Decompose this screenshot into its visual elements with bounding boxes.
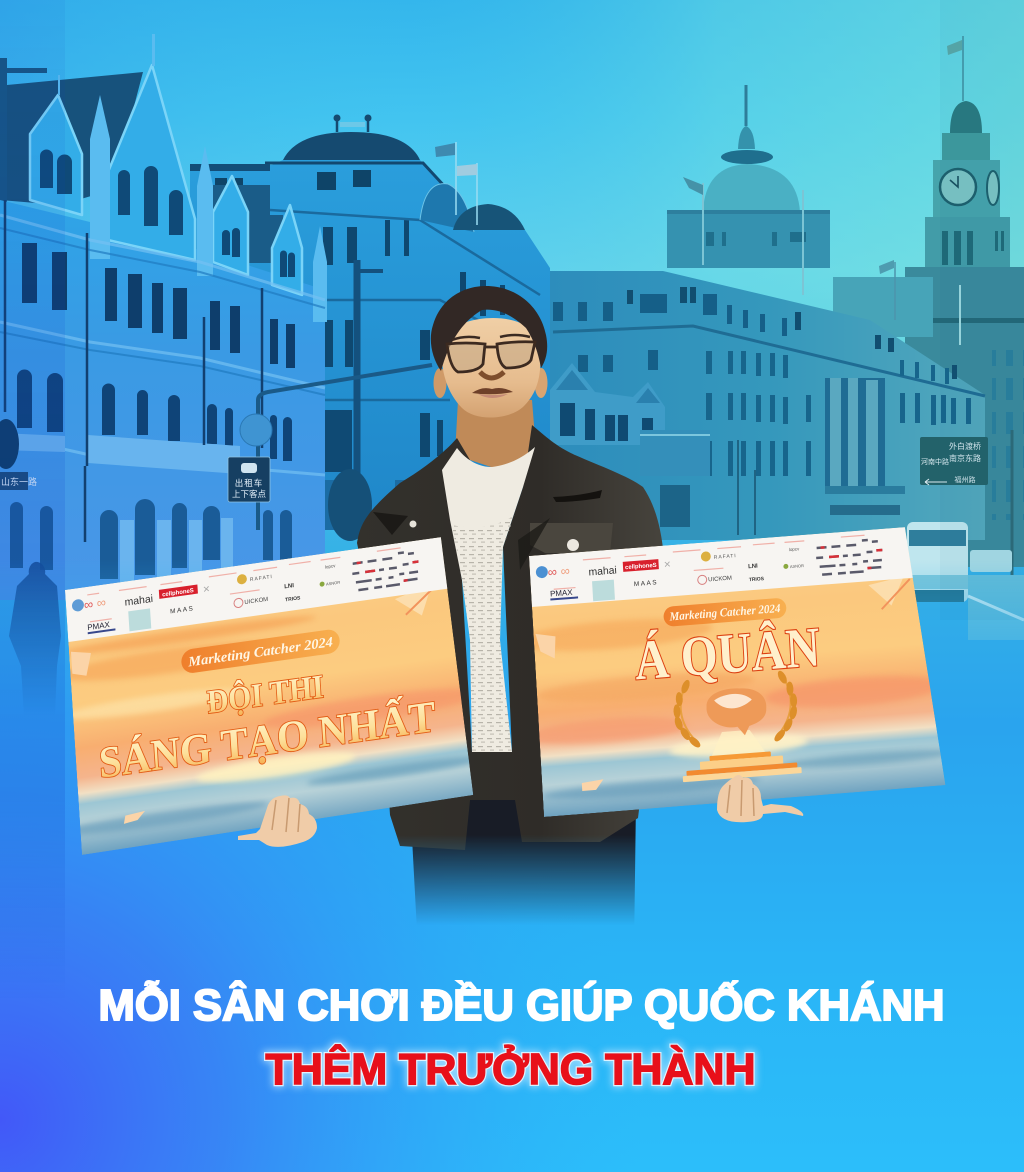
upper arched windows bbox=[40, 150, 295, 277]
turrets bbox=[58, 34, 327, 322]
sponsor header: ∞ bbox=[560, 563, 570, 579]
sponsor header: TRIOS bbox=[749, 576, 765, 583]
sponsor header: cellphoneS bbox=[162, 588, 194, 599]
ears bbox=[434, 368, 446, 398]
sponsor header: PMAX bbox=[550, 588, 573, 599]
sponsor header bbox=[63, 533, 462, 642]
trophy emblem: brain, wreath, podium bbox=[671, 668, 802, 783]
glasses bbox=[447, 342, 535, 372]
sponsor header: UICKOM bbox=[244, 597, 268, 606]
award board: Đội thi sáng tạo nhất bbox=[65, 537, 474, 855]
tag: Marketing Catcher 2024: Marketing Catcher 2024 bbox=[668, 601, 781, 624]
award board: Á quân bbox=[509, 522, 959, 819]
ground arcade bbox=[10, 499, 292, 579]
headline bbox=[98, 979, 944, 1094]
sponsor header: lopcv bbox=[789, 546, 800, 552]
headline line 2 outline: THÊM TRƯỞNG THÀNH bbox=[266, 1043, 756, 1094]
street lamps and road furniture bbox=[240, 260, 1012, 585]
sponsor header bbox=[527, 523, 937, 607]
sponsor header: ASNOR bbox=[326, 580, 340, 587]
left hand holding board bbox=[238, 795, 317, 847]
sponsor header: MAAS bbox=[170, 605, 195, 616]
sign: street name left bbox=[0, 472, 37, 490]
jacket pocket flap bbox=[530, 523, 613, 553]
sponsor header: mahai bbox=[588, 565, 617, 579]
sign: taxi stand: 上下客点 bbox=[232, 489, 266, 499]
person: body bbox=[357, 400, 663, 950]
sign: taxi stand bbox=[228, 457, 270, 502]
sign: taxi stand: 出租车 bbox=[235, 478, 263, 488]
podium bbox=[682, 749, 802, 782]
brain bbox=[705, 686, 768, 738]
drain pipes bbox=[5, 200, 262, 542]
rectangular windows bbox=[22, 243, 295, 368]
façade windows bbox=[706, 351, 971, 476]
sponsor header: PMAX bbox=[87, 620, 111, 632]
sponsor header: ∞ bbox=[547, 564, 557, 580]
board surface bbox=[65, 537, 474, 855]
sponsor header: cellphoneS bbox=[625, 563, 657, 571]
sponsor header: MAAS bbox=[634, 579, 658, 588]
sponsor header: ∞ bbox=[96, 594, 106, 611]
light rays bbox=[706, 728, 771, 765]
icon: clock face bbox=[940, 169, 976, 205]
far annex building bbox=[833, 260, 960, 345]
board title: ĐỘI THI bbox=[206, 667, 325, 721]
board title bbox=[95, 652, 437, 788]
flags bbox=[435, 142, 477, 225]
person: head bbox=[431, 286, 548, 418]
trousers bbox=[412, 800, 636, 922]
right hand holding board bbox=[717, 775, 803, 822]
sign: road direction right: 外白渡桥 bbox=[949, 441, 981, 451]
dormers and gables bbox=[30, 65, 302, 295]
face bbox=[442, 318, 540, 418]
white t-shirt bbox=[442, 447, 535, 752]
balcony bbox=[88, 435, 240, 474]
tag: Marketing Catcher 2024 bbox=[181, 628, 340, 674]
left gothic building bbox=[0, 34, 327, 600]
sign: road direction right: 河南中路 bbox=[921, 457, 949, 466]
headline line 2 glow: THÊM TRƯỞNG THÀNH bbox=[266, 1043, 756, 1094]
sign: road direction right bbox=[920, 437, 988, 485]
headline line 1: MỖI SÂN CHƠI ĐỀU GIÚP QUỐC KHÁNH bbox=[98, 979, 944, 1030]
headline line 2: THÊM TRƯỞNG THÀNH bbox=[266, 1043, 756, 1094]
sponsor header: RAFATI bbox=[250, 574, 273, 583]
nose and mouth bbox=[480, 372, 504, 378]
hair bbox=[431, 286, 547, 371]
sponsor header: RAFATI bbox=[714, 553, 737, 561]
sponsor header: TRIOS bbox=[285, 595, 301, 603]
pedestrian silhouette bbox=[9, 562, 61, 698]
bus, cars and road bbox=[907, 522, 1024, 640]
rear dormer roof bbox=[213, 185, 283, 263]
sponsor header: ✕ bbox=[663, 559, 671, 570]
sponsor header: ✕ bbox=[202, 584, 210, 595]
sponsor header: ∞ bbox=[83, 596, 94, 612]
ledges bbox=[0, 215, 325, 475]
sponsor header: LNI bbox=[284, 583, 294, 590]
board title: Á QUÂN bbox=[633, 616, 822, 692]
mid arched windows bbox=[17, 370, 292, 461]
colonnade bbox=[825, 378, 905, 494]
sponsor header: mahai bbox=[124, 593, 153, 609]
left tree bbox=[0, 419, 19, 469]
sign: road direction right: 南京东路 bbox=[949, 453, 981, 463]
tag: Marketing Catcher 2024: Marketing Catcher 2024 bbox=[187, 635, 333, 671]
board surface bbox=[509, 522, 959, 819]
eyebrows bbox=[452, 335, 530, 340]
laurel wreath bbox=[671, 668, 800, 751]
sign: road direction right: 福州路 bbox=[954, 475, 976, 484]
jacket bbox=[357, 425, 663, 850]
sponsor header: LNI bbox=[748, 564, 758, 570]
photo backdrop: Shanghai Bund buildings bbox=[0, 34, 1024, 716]
right domed building bbox=[550, 85, 985, 540]
sponsor header: ASNOR bbox=[790, 563, 804, 569]
sponsor header: UICKOM bbox=[708, 576, 732, 583]
sponsor header: lopcv bbox=[325, 563, 336, 570]
board title: SÁNG TẠO NHẤT bbox=[97, 691, 437, 788]
second dome bbox=[453, 204, 525, 230]
porch with small gables bbox=[550, 363, 710, 527]
centre dome building bbox=[190, 114, 550, 530]
sign: street name left: 山东一路 bbox=[1, 476, 37, 487]
neck bbox=[455, 400, 536, 470]
clock tower building bbox=[905, 36, 1024, 567]
